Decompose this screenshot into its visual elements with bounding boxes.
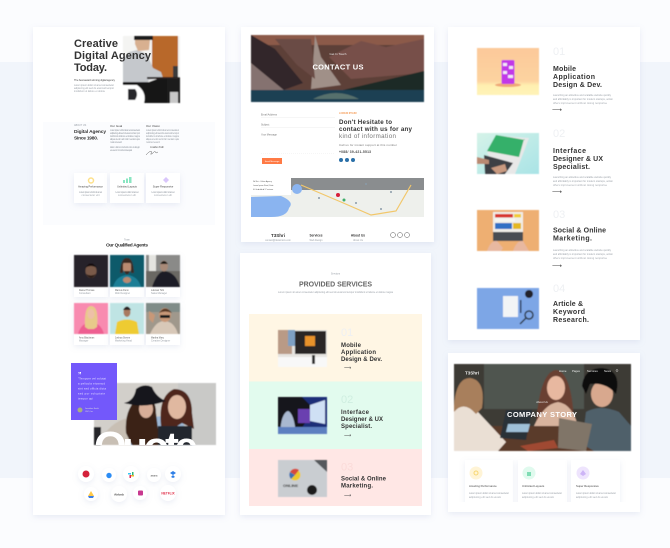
card text: Amazing Performance xyxy=(78,186,103,188)
hero heading: Today. xyxy=(74,62,107,74)
agents heading: Our Qualified Agents xyxy=(106,242,148,248)
contact form: Subject xyxy=(261,124,270,126)
card text: Unlimited Layouts xyxy=(117,186,138,188)
service 02 text: Interface xyxy=(553,148,586,155)
our vision: Lorem ipsum dolor sit amet consectetur xyxy=(146,129,179,132)
agent captions: Manager xyxy=(79,340,89,342)
our goal: Our Goal xyxy=(110,124,123,128)
contact copy: +088/ 39-421-5513 xyxy=(339,150,371,154)
contact hero text: Get In Touch xyxy=(330,52,347,56)
our goal xyxy=(110,124,141,152)
agent captions: Marketing Head xyxy=(115,340,133,342)
agent captions: Sales Manager xyxy=(151,292,167,295)
service 03 text: Social & Online xyxy=(553,228,606,234)
card text: Lorem ipsum dolor sit amet xyxy=(116,191,139,194)
send button xyxy=(262,158,282,164)
panel: contact page xyxy=(241,27,434,242)
service 02 text: and affordably is important for modern startups, action xyxy=(553,180,614,183)
service 3 text xyxy=(341,462,387,499)
agents heading xyxy=(106,238,148,248)
service 2 text: Designer & UX xyxy=(341,417,383,423)
quote card: sed por voluptate xyxy=(78,392,105,396)
hero heading: Digital Agency xyxy=(74,50,152,62)
card text: consectetur elit xyxy=(82,194,100,197)
big quote word: Quote xyxy=(94,423,198,470)
contact footer: Services xyxy=(309,234,323,238)
footer social icons xyxy=(390,232,410,238)
agent captions: Consultant xyxy=(79,292,91,295)
story nav: T3Shri xyxy=(465,370,479,376)
hero text: adipiscing elit sed do eiusmod tempor xyxy=(74,87,114,90)
service 1 text xyxy=(341,327,382,372)
service 01 text: and affordably is important for modern startups, action xyxy=(553,98,614,101)
contact hero text xyxy=(312,52,364,72)
services heading xyxy=(278,272,394,294)
contact form: Email Address xyxy=(261,114,278,116)
story nav: Pages xyxy=(572,369,581,373)
service image: phone on peach xyxy=(476,48,540,96)
our goal: aliqua ut enim ad minim veniam quis xyxy=(110,138,141,141)
quote card: Jonathan Smith xyxy=(85,407,99,410)
hero text: The best award winning digital agency xyxy=(74,78,116,82)
service 02 text: 02 xyxy=(553,128,565,140)
logo: netflix wordmark: NETFLIX xyxy=(161,492,176,496)
contact copy: kind of information xyxy=(339,133,397,140)
hero text: incididunt ut labore et dolore xyxy=(74,90,106,93)
card text: Lorem ipsum dolor sit amet xyxy=(152,191,175,194)
story card text: Lorem ipsum dolor sit amet consectetur xyxy=(576,492,616,495)
service 03 text: ⟶ xyxy=(552,263,562,270)
contact footer: About Us xyxy=(353,239,364,242)
service 1 text: ⟶ xyxy=(344,366,351,372)
service image: screens xyxy=(277,396,328,435)
service 02 text: offers improvement without losing temporise xyxy=(553,184,608,187)
icon: responsive cube xyxy=(163,177,169,183)
icon: instagram xyxy=(138,490,143,496)
icon: bars xyxy=(123,177,132,183)
quote card: tempor qui xyxy=(78,396,93,400)
contact copy: Call us for instant support at this number xyxy=(339,143,397,147)
story card text xyxy=(469,484,616,499)
story card text: adipiscing elit sed do eiusm xyxy=(576,496,608,499)
service 1 text: Design & Dev. xyxy=(341,357,382,363)
feature cards xyxy=(74,173,180,203)
story title xyxy=(507,400,577,419)
service band 1 xyxy=(249,314,422,382)
quote card: sint sed officia dicta xyxy=(78,386,106,390)
agent photo 6 xyxy=(145,302,181,335)
agent captions: Amy Blackman xyxy=(79,336,95,340)
service 01 text: Design & Dev. xyxy=(553,82,602,89)
agent photo 4 xyxy=(73,302,109,335)
agent captions: Lukman Tobi xyxy=(151,290,164,292)
logo: airbnb wordmark: Airbnb xyxy=(114,492,124,496)
our vision: Jonathan Smith xyxy=(150,146,165,149)
story nav: Home xyxy=(559,369,567,373)
story card text: Lorem ipsum dolor sit amet consectetur xyxy=(522,492,562,495)
service image: laptop on mint xyxy=(476,132,540,175)
services heading: PROVIDED SERVICES xyxy=(299,282,372,288)
contact footer: Web Design xyxy=(310,239,323,242)
story card text: Lorem ipsum dolor sit amet consectetur xyxy=(469,492,509,495)
service image: laptop marketing xyxy=(476,209,540,252)
services heading: Lorem ipsum sit amet consectetur adipiscing elit sed do eiusmod tempor incididunt ut labore et dolore magna xyxy=(278,291,394,294)
our goal: Lorem ipsum dolor sit amet consectetur xyxy=(110,129,140,132)
story nav: Services xyxy=(587,369,598,373)
story title: COMPANY STORY xyxy=(507,410,577,419)
our goal: tation ullamco laboris nisi ut aliquip xyxy=(110,146,141,149)
service 01 text: offers improvement without losing temporise xyxy=(553,102,608,105)
story nav: News xyxy=(604,369,612,373)
map: Lorem Ipsum Road, Suite xyxy=(253,184,273,187)
panel: agency home page xyxy=(33,27,225,515)
our vision xyxy=(146,124,180,155)
panel: provided services xyxy=(240,253,431,515)
panel: company story xyxy=(448,353,640,512)
service 02 text: ⟶ xyxy=(552,189,562,196)
service 01 text: ⟶ xyxy=(552,107,562,114)
service 3 text: Marketing. xyxy=(341,484,373,490)
hero heading xyxy=(74,38,152,74)
card text xyxy=(78,186,175,197)
service 03 text: Launching an attractive and scalable website quickly xyxy=(553,249,612,252)
story card text: adipiscing elit sed do eiusm xyxy=(469,496,501,499)
service 3 text: 03 xyxy=(341,462,353,474)
hero heading: Creative xyxy=(74,38,118,50)
contact hero text: CONTACT US xyxy=(312,62,364,72)
service 03 text: 03 xyxy=(553,209,565,221)
quote card: CEO, Inc xyxy=(85,411,93,413)
contact footer: T3Shri xyxy=(271,233,285,238)
service 03 text: and affordably is important for modern startups, action xyxy=(553,253,614,256)
service 1 text: 01 xyxy=(341,327,353,339)
service 02 text: Specialist. xyxy=(553,164,590,171)
agent captions: Joshua Steven xyxy=(115,336,131,340)
agent captions xyxy=(79,289,170,342)
story icon 1 xyxy=(470,466,482,480)
story icon 3 xyxy=(576,466,590,480)
service 03 text: offers improvement without losing temporise xyxy=(553,257,608,260)
quote card: ” xyxy=(78,372,82,379)
services heading: Services xyxy=(331,272,341,276)
social dots xyxy=(339,158,355,162)
agent photo 2 xyxy=(109,254,145,288)
contact footer: contact@tdwarriors.com xyxy=(265,239,291,242)
contact form: Send Message xyxy=(265,161,280,163)
about heading xyxy=(74,124,106,142)
service 2 text xyxy=(341,394,383,439)
card text: Super Responsive xyxy=(153,186,174,188)
about heading: Since 1980. xyxy=(74,136,98,142)
agent photo 5 xyxy=(110,302,144,335)
about heading: ABOUT US xyxy=(74,124,87,127)
contact form: Your Message xyxy=(261,134,277,136)
service 1 text: Application xyxy=(341,350,376,356)
agent photo 3 xyxy=(145,254,181,288)
story card text: adipiscing elit sed do eiusm xyxy=(522,496,554,499)
hero photo: man at desk xyxy=(122,35,181,104)
service band 2 xyxy=(249,382,422,449)
icon: performance ring xyxy=(88,178,94,183)
contact form xyxy=(261,114,335,164)
quote card: "Tempore vel volutat xyxy=(78,376,106,380)
contact copy xyxy=(339,112,413,162)
quote card xyxy=(71,363,117,420)
service 04 text xyxy=(553,283,589,324)
icon: pinterest xyxy=(82,470,90,478)
card text: consectetur elit xyxy=(154,194,172,197)
our goal: ex ea commodo consequat xyxy=(110,149,132,152)
service image: online chart xyxy=(278,459,328,498)
service 04 text: Keyword xyxy=(553,309,585,316)
agent captions: Creative Designer xyxy=(151,340,170,342)
service 2 text: Specialist. xyxy=(341,424,372,430)
service 01 text: Launching an attractive and scalable website quickly xyxy=(553,94,612,97)
icon: messenger xyxy=(106,473,112,478)
service 01 text: 01 xyxy=(553,46,565,58)
icon: google drive xyxy=(88,491,94,496)
service 01 text: Application xyxy=(553,74,595,81)
card text: consectetur elit xyxy=(118,194,136,197)
service 02 text xyxy=(552,128,614,196)
story feature cards xyxy=(464,464,620,502)
agent cards xyxy=(74,255,180,345)
map: 4.6 ★★★★★ 17 reviews xyxy=(253,188,273,191)
agent captions: Martha Mary xyxy=(151,336,165,340)
our goal: adipiscing elit sed do eiusmod tempor xyxy=(110,132,140,135)
agent photo 1 xyxy=(73,254,109,288)
agents heading: Team xyxy=(124,238,130,242)
service image: online chart: ONLINE xyxy=(283,483,298,488)
our vision: Our Vision xyxy=(146,124,160,128)
quote photo xyxy=(93,382,216,446)
service band 3 xyxy=(249,449,422,506)
our vision: adipiscing elit sed do eiusmod tempor xyxy=(146,132,179,135)
service 03 text xyxy=(552,209,614,270)
contact footer xyxy=(265,232,410,242)
story icon 2 xyxy=(522,466,536,480)
service 02 text: Designer & UX xyxy=(553,156,603,163)
story hero photo xyxy=(453,363,632,452)
panel: services detail xyxy=(448,27,640,340)
service 2 text: Interface xyxy=(341,410,370,416)
dotted section background xyxy=(43,122,215,225)
partner logos xyxy=(78,466,181,502)
map: 3d Shri - Online Agency xyxy=(253,180,272,183)
service 3 text: ⟶ xyxy=(344,493,351,499)
quote card: a pelicula eiusmod xyxy=(78,382,105,386)
contact copy: Don't Hesitate to xyxy=(339,119,392,126)
story nav xyxy=(465,369,618,376)
our vision: nostrud exerci xyxy=(146,141,160,144)
service 03 text: Marketing. xyxy=(553,236,592,242)
agent captions: Daniel Thomas xyxy=(79,290,95,292)
service image: notebook on blue xyxy=(476,287,540,330)
service 3 text: Social & Online xyxy=(341,476,387,482)
service 01 text xyxy=(552,46,614,114)
agent captions: Web Designer xyxy=(115,292,130,295)
agent captions: Marcus Dunn xyxy=(115,289,129,292)
service 2 text: ⟶ xyxy=(344,433,351,439)
story card text: Super Responsive xyxy=(576,484,599,488)
service 1 text: Mobile xyxy=(341,343,362,349)
contact copy: contact with us for any xyxy=(339,126,413,133)
contact footer: About Us xyxy=(351,234,365,238)
service 01 text: Mobile xyxy=(553,66,576,73)
story title: About Us xyxy=(536,400,548,404)
our vision: aliqua ut enim ad minim veniam quis xyxy=(146,138,180,141)
card text: Lorem ipsum dolor sit amet xyxy=(79,191,102,194)
icon: dropbox xyxy=(170,471,176,478)
map xyxy=(251,178,424,217)
icon: slack xyxy=(128,472,134,478)
contact hero mountain photo xyxy=(250,34,425,103)
service image: monitor xyxy=(278,329,327,367)
hero text: Lorem ipsum dolor sit amet consectetur xyxy=(74,84,114,87)
hero text xyxy=(74,78,116,93)
service 2 text: 02 xyxy=(341,394,353,406)
about heading: Digital Agency xyxy=(74,129,106,135)
story card text: Amazing Performance xyxy=(469,484,497,488)
logo: asana wordmark: asana xyxy=(151,474,158,478)
service 04 text: Research. xyxy=(553,317,589,324)
service 02 text: Launching an attractive and scalable website quickly xyxy=(553,176,612,179)
our vision: incididunt ut labore et dolore magna xyxy=(146,135,180,138)
our goal: nostrud exerci xyxy=(110,141,123,144)
contact copy: LOREM IPSUM xyxy=(339,112,357,115)
service 04 text: 04 xyxy=(553,283,565,295)
story card text: Unlimited Layouts xyxy=(522,484,545,488)
service 04 text: Article & xyxy=(553,301,583,308)
our goal: incididunt ut labore et dolore magna xyxy=(110,135,141,138)
